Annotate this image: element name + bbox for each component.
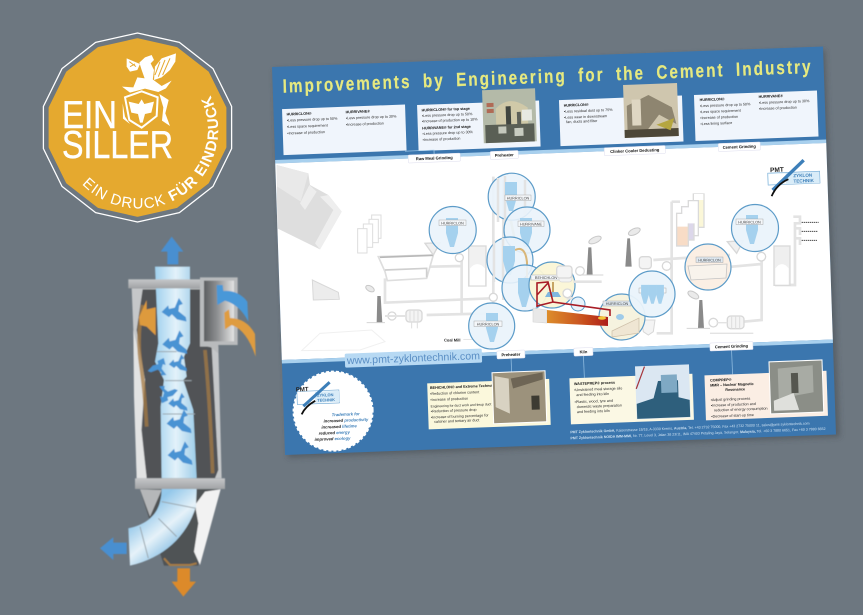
panel: cement grinding <box>694 90 819 141</box>
label: preheater top: Preheater <box>495 152 514 158</box>
label: coal mill: Coal Mill <box>444 338 460 342</box>
photo: preheater tower <box>482 88 537 143</box>
logo: PMT Zyklontechnik: ZYKLON <box>793 173 813 178</box>
quarry mountain <box>277 165 342 249</box>
panel: raw meal grinding: ▪Less space requirement <box>287 124 328 129</box>
cone <box>140 489 218 566</box>
panel: raw meal grinding: HURRICLON® <box>287 112 312 117</box>
dust streaks <box>139 305 213 473</box>
logo: PMT Zyklontechnik: TECHNIK <box>793 178 815 184</box>
label: cement grinding top: Cement Grinding <box>723 144 756 150</box>
stack 2 <box>625 226 641 267</box>
panel: cement grinding: ▪Less lining surface <box>700 121 732 126</box>
arrow: clean gas left <box>100 537 127 560</box>
arrow: gas inlet <box>217 285 248 322</box>
label: cement grinding top <box>718 142 760 152</box>
label: preheater top <box>490 150 518 160</box>
panel: kiln wasteprep: WASTEPREP® process <box>574 381 615 386</box>
poster base panels <box>272 47 836 455</box>
photo: preheater interior <box>491 370 547 424</box>
website banner: www.pmt-zyklontechnik.com <box>346 350 480 367</box>
icon: griffin crest <box>122 53 176 128</box>
limestone pile <box>312 280 339 300</box>
circle: preheater stage 1 <box>488 173 535 222</box>
top flange <box>128 279 200 288</box>
shield <box>125 91 158 128</box>
panel: kiln wasteprep: ▪Unstrained meal storage silo <box>574 386 622 392</box>
circle: preheater stage 3 <box>487 237 533 283</box>
vortex finder tube <box>155 267 197 478</box>
badge: trademark: PMT <box>296 386 309 394</box>
panel: preheater: ▪Less pressure drop up to 30% <box>422 130 474 136</box>
wordmark: EIN SILLER <box>62 94 173 167</box>
panel: kiln wasteprep: domestic waste preparation <box>577 403 622 409</box>
circle: clinker filter <box>629 271 675 317</box>
label: kiln: Kiln <box>579 349 588 354</box>
panel: clinker cooler dedusting: ▪Less residual dust up to 75% <box>564 108 613 114</box>
label: preheater bottom <box>497 350 526 381</box>
pipes <box>567 202 800 333</box>
panel: cement grinding: HURRIVANE® <box>759 94 783 99</box>
panel: preheater technology: calciner and tertiary air duct <box>434 418 479 424</box>
logo: PMT Zyklontechnik: PMT <box>770 167 784 174</box>
badge: trademark <box>292 370 374 452</box>
poster bottom elements <box>292 336 829 452</box>
panel: preheater technology: ▪Reduction of pressure drop <box>431 408 477 414</box>
circle: clinker cooler <box>599 294 645 340</box>
label: cement grinding bottom: Cement Grinding <box>715 343 749 349</box>
white liner <box>133 330 147 478</box>
poster shadow <box>274 50 840 458</box>
cyclone body shell <box>132 288 222 478</box>
red tertiary air duct <box>537 282 610 316</box>
fans and filters <box>557 241 766 335</box>
panel: cement comprep: ▪Increase of production and <box>711 402 756 408</box>
circle: raw mill cyclone: HURRICLON <box>441 222 464 226</box>
wordmark: EIN SILLER: EIN <box>62 94 117 137</box>
panel: raw meal grinding: HURRIVANE® <box>346 109 370 114</box>
badge: trademark: increased productivity <box>323 417 369 424</box>
panel: preheater technology: Engineering for duct work and tieup duct <box>430 402 491 409</box>
panel: preheater: HURRICLON® for top stage <box>422 107 470 112</box>
badge: trademark: reduced energy <box>319 430 351 436</box>
label: raw meal grinding <box>405 149 460 163</box>
circle: raw mill cyclone <box>429 206 476 254</box>
helmet and mantling <box>122 77 172 93</box>
label: preheater bottom: Preheater <box>501 352 521 357</box>
footer contact lines <box>570 421 826 440</box>
circle: clinker cooler: HURRICLON <box>606 302 629 306</box>
stack <box>365 284 385 323</box>
panel: raw meal grinding: ▪Less pressure drop up to 30% <box>346 114 397 120</box>
circle: small kiln riser <box>571 297 585 311</box>
label: kiln <box>574 347 594 378</box>
label: clinker cooler dedusting: Clinker Cooler Dedusting <box>610 147 660 154</box>
photo: waste plant <box>635 364 691 419</box>
arrow: dust to wall <box>139 300 156 335</box>
footer contact lines: PMT Zyklontechnik GmbH, Kaiserstrasse 18/18, A-3330 Krems, Austria, Tel. +43 2732 75000, Fax +43 2732 75000 11, sales@pmt-zyklontechnik.com <box>570 421 810 434</box>
plant diagram: right half <box>557 194 819 335</box>
panel: raw meal grinding: ▪Increase of production <box>346 121 384 127</box>
panel: preheater technology: ▪Reduction of chlorine content <box>430 390 479 396</box>
panel: preheater: HURRIVANE® for 2nd stage <box>422 125 471 130</box>
panel: kiln wasteprep <box>569 364 694 424</box>
panel: cement comprep: MMR – Nuclear Magnetic <box>710 382 754 388</box>
seal: Ein Siller: EIN DRUCK FÜR EINDRUCK <box>82 95 218 209</box>
panel: preheater technology: ▪Increase of burning percentage for <box>431 413 489 420</box>
panel: cement comprep: reduction of energy consumption <box>714 407 768 413</box>
badge: trademark: TECHNIK <box>317 397 335 403</box>
panel: kiln wasteprep: and feeding into kiln <box>577 409 610 414</box>
panel: cement grinding: ▪Increase of production <box>700 115 738 120</box>
panel: preheater technology: ▪Increase of production <box>430 397 468 402</box>
panel: raw meal grinding <box>282 105 407 155</box>
wordmark: EIN SILLER: SILLER <box>62 124 173 167</box>
badge: trademark: ZYKLON <box>317 392 334 398</box>
circle: preheater stage 2: HURRIVANE <box>520 222 543 226</box>
panel: kiln wasteprep: and feeding into kiln <box>576 392 609 397</box>
rotary kiln <box>533 308 608 326</box>
arrow: dust inlet <box>224 309 256 357</box>
footer contact lines: PMT Zyklontechnik NOIDA IMM-MMI, Nr. 77, Level 3, Jalan 38 23/11, IMA 47403 Petaling Jaya, Selangor, Malaysia, Tel. +60 3 7880 6651, Fax +60 3 7880 6652 <box>570 427 826 440</box>
panel: cement comprep: ▪Decrease of start-up time <box>711 413 754 419</box>
griffin wing <box>154 53 176 80</box>
circle: preheater stage 2 <box>504 207 550 253</box>
circle: cement mill <box>685 244 731 290</box>
stack 1 <box>582 234 603 275</box>
griffin claw foliage <box>127 58 140 72</box>
cyclone interior lining <box>137 289 218 478</box>
raw material stores <box>358 215 381 253</box>
panel: raw meal grinding: ▪Less pressure drop up to 50% <box>287 117 338 123</box>
cyclone cutaway illustration <box>100 237 256 597</box>
panel: preheater technology <box>427 370 551 429</box>
panel: cement grinding: ▪Less pressure drop up to 50% <box>700 102 751 108</box>
arrow: clean gas up <box>161 237 183 264</box>
raw mill pipes <box>385 177 527 315</box>
stack 3 <box>687 289 710 328</box>
griffin head and body <box>139 55 154 81</box>
circle: preheater stage 4 <box>502 265 548 311</box>
panel: cement grinding: ▪Less space requirement <box>700 109 741 114</box>
panel: cement grinding: ▪Less pressure drop up to 30% <box>759 99 810 105</box>
separator hopper <box>425 243 440 255</box>
slogan: Ein Druck für Eindruck <box>82 89 218 208</box>
panel: cement grinding: HURRICLON® <box>700 97 725 102</box>
label: clinker cooler dedusting <box>604 145 665 156</box>
panel: kiln wasteprep: ▪Plastic, wood, tyre and <box>575 399 613 404</box>
cement silo right <box>774 246 790 285</box>
bottom flange <box>135 478 225 489</box>
panel: cement comprep: COMPREP® <box>710 378 732 383</box>
panel: preheater technology: BEHICHLON® and Extreme Technology <box>430 383 500 390</box>
circle: calciner: BEHICHLON <box>535 276 557 280</box>
badge: trademark: improved ecology <box>314 436 351 442</box>
panel: cement comprep: ▪Adjust grinding process <box>711 397 751 402</box>
circle: preheater stage 1: HURRICLON <box>507 196 530 200</box>
circle: coal mill cyclone: HURRICLON <box>477 322 500 326</box>
circle: cement separator: HURRICLON <box>738 220 761 224</box>
panel: clinker cooler dedusting: fan, ducts and filter <box>566 119 598 124</box>
panel: cement comprep: Resonance <box>725 387 745 392</box>
label: coal mill <box>444 338 473 342</box>
panel: preheater: ▪Increase of production up to 10% <box>422 117 478 123</box>
circle: coal mill cyclone <box>469 303 515 349</box>
seal outline <box>43 33 232 222</box>
plant diagram: left half <box>277 165 527 351</box>
photo: clinker cooler <box>623 83 679 138</box>
arrow: dust down <box>172 568 196 597</box>
shield eagle <box>129 99 154 123</box>
circle: calciner <box>529 262 575 308</box>
label: raw meal grinding: Raw Meal Grinding <box>416 155 453 161</box>
panel: preheater: ▪Increase of production <box>423 137 460 142</box>
faint floor outline <box>302 330 385 351</box>
elbow outlet <box>128 488 197 566</box>
panel: clinker cooler dedusting <box>559 83 684 146</box>
inlet box <box>200 277 238 353</box>
cement silos <box>677 194 704 246</box>
poster <box>272 47 840 458</box>
fan and filter <box>385 254 497 328</box>
packing lines <box>802 222 819 240</box>
seal: Ein Siller <box>42 32 232 223</box>
panel: cement grinding: ▪Increase of production <box>759 106 797 111</box>
panel: cement comprep <box>704 359 828 420</box>
right mantling curl <box>159 94 170 126</box>
panel: preheater: ▪Less pressure drop up to 50% <box>422 112 473 118</box>
photo: cement plant <box>768 359 824 414</box>
circle: cement separator <box>732 204 778 252</box>
vortex arrows <box>148 298 193 465</box>
logo: PMT Zyklontechnik <box>767 160 820 196</box>
panel: clinker cooler dedusting: HURRICLON® <box>564 103 589 108</box>
label: cement grinding bottom <box>710 341 754 375</box>
badge: trademark: Trademark for <box>332 411 360 417</box>
circle: cement mill: HURRICLON <box>698 258 721 262</box>
badge: trademark: increased lifetime <box>321 423 358 430</box>
panel: clinker cooler dedusting: ▪Less wear in downstream <box>564 114 607 120</box>
panel: raw meal grinding: ▪Increase of production <box>287 130 325 136</box>
raw mill <box>378 255 433 281</box>
title: Improvements by Engineering for the Cement Industry <box>282 57 813 98</box>
panel: preheater <box>417 88 541 151</box>
raw meal silo <box>469 246 486 286</box>
seal gold face <box>50 40 225 215</box>
